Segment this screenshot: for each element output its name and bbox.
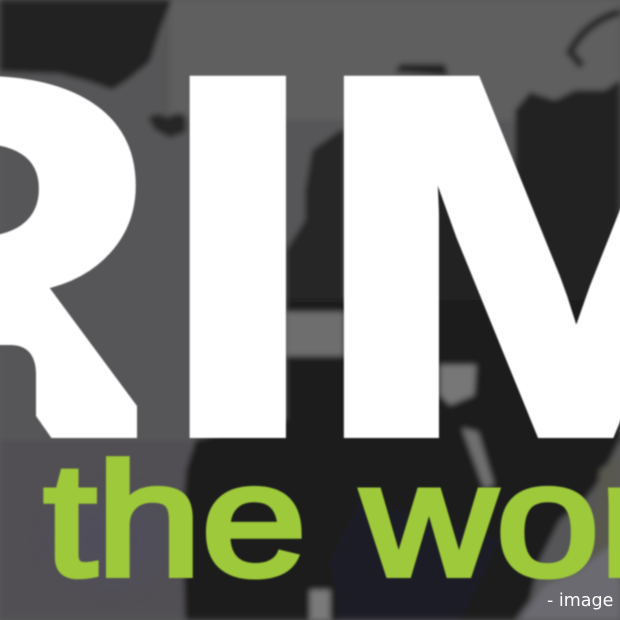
subheading: green text: the — [44, 431, 306, 610]
landmass: inner asia — [430, 160, 540, 438]
light patches — [286, 312, 344, 356]
caption: - image — [547, 591, 613, 611]
landmass: africa and south — [182, 300, 620, 620]
landmass: north strip — [395, 64, 448, 76]
landmass: top-left — [0, 0, 172, 90]
landmass: europe — [286, 130, 345, 320]
headline: white cropped letters — [0, 74, 620, 439]
landmass: lower part of africa — [330, 500, 500, 620]
landmass: asia — [515, 80, 620, 310]
arctic arc — [570, 12, 620, 66]
landmass: small island — [148, 113, 186, 138]
purple tint on lower left ocean — [50, 495, 170, 585]
subheading: green text — [44, 430, 620, 610]
